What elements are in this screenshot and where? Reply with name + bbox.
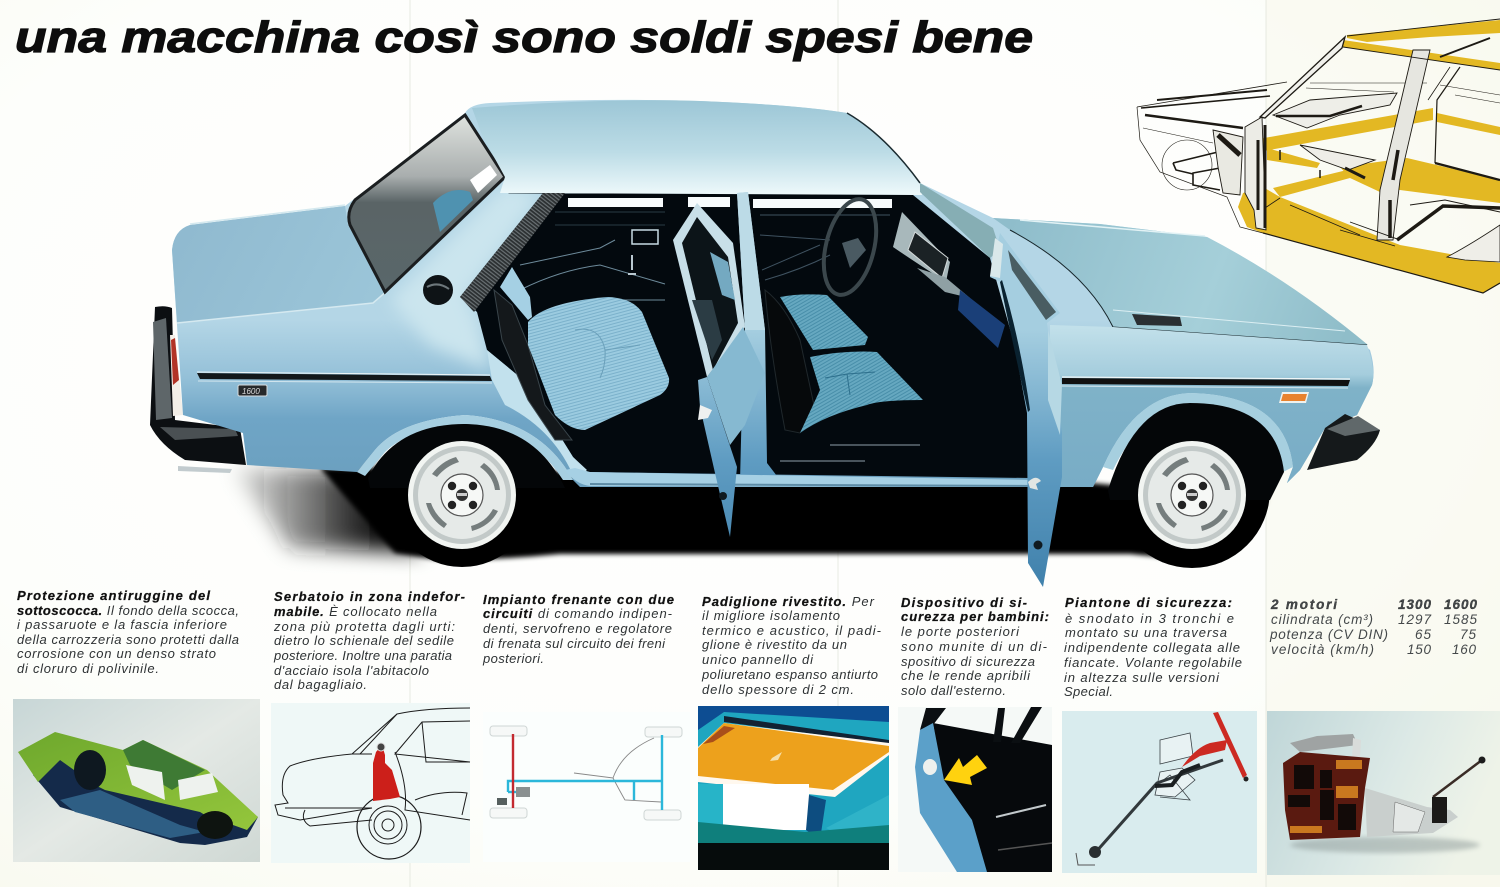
caption: Piantone: montato su una traversa	[1065, 625, 1227, 640]
caption: Padiglione: Padiglione rivestito. Per	[702, 594, 875, 609]
caption: Dispositivo: le porte posteriori	[901, 624, 1020, 639]
engine spec table: 160	[1452, 642, 1476, 657]
model badge	[238, 385, 267, 396]
wheel arches	[357, 393, 1293, 500]
caption: Padiglione	[701, 594, 882, 697]
window strips seen through car	[568, 197, 892, 208]
sill	[565, 468, 1040, 487]
engine spec table: potenza (CV DIN)	[1269, 627, 1388, 642]
open rear door	[673, 203, 765, 537]
caption: Serbatoio: dal bagagliaio.	[274, 677, 367, 692]
caption: Padiglione: dello spessore di 2 cm.	[702, 682, 854, 697]
side marker	[1279, 392, 1309, 403]
frame outlines	[1137, 19, 1500, 293]
engine spec table: 1300	[1398, 597, 1431, 612]
thumbnail: green underbody shell	[13, 699, 260, 862]
trunk lid	[172, 206, 385, 323]
front bumper	[1307, 414, 1380, 470]
windscreen	[920, 183, 1000, 258]
caption: Impianto frenante: posteriori.	[482, 651, 544, 666]
engine spec table: 2 motori	[1270, 597, 1337, 612]
caption: Protezione antiruggine: i passaruote e la fascia inferiore	[17, 617, 227, 632]
thumbnail: braking circuit diagram	[483, 712, 690, 862]
caption: Serbatoio: d'acciaio isola l'abitacolo	[274, 663, 429, 678]
thumbnail: safety steering column	[1062, 711, 1257, 873]
engine spec table: 75	[1460, 627, 1476, 642]
caption: Serbatoio: mabile. È collocato nella	[274, 604, 437, 619]
caption: Dispositivo: sono munite di un di-	[901, 639, 1048, 654]
caption: Dispositivo: che le rende apribili	[901, 668, 1031, 683]
dashboard	[815, 194, 1005, 348]
caption: Padiglione: glione è rivestito da un	[702, 637, 847, 652]
body frame cutaway illustration	[1137, 19, 1500, 293]
engine spec table: 1297	[1398, 612, 1431, 627]
caption: Piantone: è snodato in 3 tronchi e	[1065, 611, 1234, 626]
caption: Impianto frenante: circuiti di comando indipen-	[483, 606, 673, 621]
engine spec table: 65	[1415, 627, 1431, 642]
hood	[993, 218, 1368, 345]
thumbnail: engine and gearbox	[1267, 711, 1500, 875]
front fender	[1050, 325, 1373, 487]
front body trim	[1062, 378, 1350, 386]
engine spec table: velocità (km/h)	[1271, 642, 1374, 657]
caption: Protezione antiruggine: Protezione antiruggine del	[17, 588, 210, 603]
caption: Piantone: Piantone di sicurezza:	[1065, 595, 1232, 610]
caption: Protezione antiruggine	[17, 588, 239, 676]
caption: Piantone: in altezza sulle versioni	[1064, 670, 1220, 685]
caption: Protezione antiruggine: sottoscocca. Il fondo della scocca,	[17, 603, 239, 618]
interior opening	[460, 193, 1030, 478]
caption: Impianto frenante: denti, servofreno e regolatore	[483, 621, 672, 636]
title: una macchina così sono soldi spesi bene	[15, 13, 1033, 62]
caption: Protezione antiruggine: di cloruro di polivinile.	[17, 661, 159, 676]
caption: Impianto frenante	[482, 592, 674, 666]
caption: Impianto frenante: di frenata sul circuito dei freni	[483, 636, 666, 651]
front seat	[765, 290, 923, 433]
captions row	[17, 588, 1477, 699]
caption: Serbatoio: dietro lo schienale del sedile	[274, 633, 454, 648]
caption: Piantone	[1064, 595, 1242, 699]
rear bumper and tail	[150, 306, 246, 465]
frame yellow parts	[1238, 20, 1500, 293]
main car photo	[150, 100, 1380, 587]
caption: Protezione antiruggine: corrosione con un denso strato	[17, 646, 216, 661]
caption: Piantone: fiancate. Volante regolabile	[1064, 655, 1242, 670]
ground shadow under car	[178, 412, 1270, 568]
caption: Dispositivo	[901, 595, 1049, 698]
caption: Serbatoio: Serbatoio in zona indefor-	[274, 589, 465, 604]
B pillar	[737, 192, 780, 482]
caption: Dispositivo: solo dall'esterno.	[901, 683, 1006, 698]
C pillar highlight	[390, 185, 540, 370]
caption: Dispositivo: spositivo di sicurezza	[901, 654, 1035, 669]
caption: Padiglione: poliuretano espanso antiurto	[701, 667, 878, 682]
caption: Padiglione: unico pannello di	[702, 652, 814, 667]
hood vent	[1132, 314, 1182, 326]
front wheel	[1138, 441, 1246, 549]
engine spec table: 1600	[1444, 597, 1477, 612]
caption: Piantone: Special.	[1064, 684, 1113, 699]
open front door	[990, 233, 1062, 587]
engine spec table	[1269, 597, 1477, 657]
thumbnail: child safety lock	[898, 707, 1052, 872]
caption: Impianto frenante: Impianto frenante con due	[483, 592, 674, 607]
engine spec table: 1585	[1444, 612, 1477, 627]
rear window	[349, 115, 505, 292]
engine spec table: cilindrata (cm³)	[1271, 612, 1373, 627]
door jamb highlight	[487, 350, 587, 480]
quarter pillar trim	[460, 193, 565, 312]
rear wheel	[408, 441, 516, 549]
caption: Dispositivo: Dispositivo di si-	[901, 595, 1027, 610]
rear seat	[494, 267, 669, 440]
fuel cap	[423, 275, 453, 305]
icon: yellow arrow	[944, 755, 987, 785]
caption: Serbatoio	[273, 589, 465, 692]
thumbnail: fuel tank diagram	[271, 703, 470, 863]
caption: Padiglione: il migliore isolamento	[702, 608, 840, 623]
rear body trim	[197, 373, 492, 381]
thumbnail: padded roof lining	[698, 706, 889, 870]
engine spec table: 150	[1407, 642, 1431, 657]
model badge: 1600	[242, 387, 260, 396]
caption: Padiglione: termico e acustico, il padi-	[702, 623, 882, 638]
rear interior trim	[520, 212, 920, 461]
caption: Piantone: indipendente collegata alle	[1064, 640, 1240, 655]
caption: Protezione antiruggine: della carrozzeria sono protetti dalla	[17, 632, 239, 647]
far front seat	[780, 294, 868, 350]
roof	[472, 100, 922, 195]
caption: Serbatoio: zona più protetta dagli urti:	[273, 619, 455, 634]
caption: Dispositivo: curezza per bambini:	[901, 609, 1049, 624]
caption: Serbatoio: posteriore. Inoltre una paratia	[273, 648, 452, 663]
body shell	[172, 100, 1374, 487]
